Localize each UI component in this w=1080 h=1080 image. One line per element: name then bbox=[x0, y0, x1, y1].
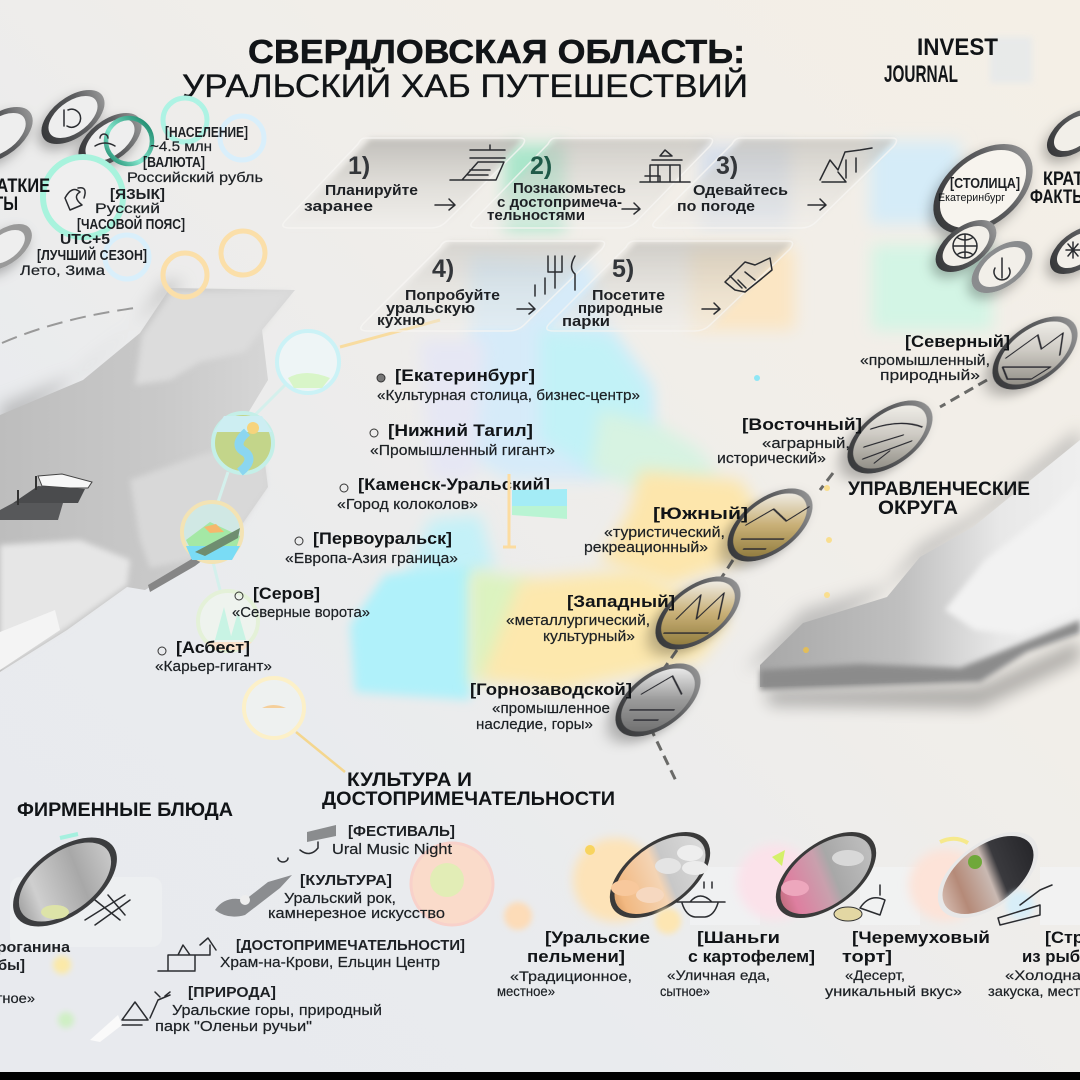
left fact texts bbox=[20, 125, 263, 278]
card 3: по погоде bbox=[677, 199, 755, 215]
city labels: «Культурная столица, бизнес-центр» bbox=[377, 388, 640, 404]
left fact rings bbox=[0, 93, 265, 297]
card 5: Посетите bbox=[592, 288, 665, 304]
right key facts bbox=[921, 112, 1080, 290]
dish 1: stroganina bbox=[0, 834, 162, 1028]
city labels: «Северные ворота» bbox=[232, 605, 370, 621]
dish 3: shangi: [Шаньги bbox=[697, 929, 780, 947]
card 1: 1) bbox=[348, 152, 370, 180]
city labels: [Первоуральск] bbox=[313, 530, 452, 548]
card 4: Попробуйте bbox=[405, 288, 500, 304]
card 5: парки bbox=[562, 314, 610, 330]
soft colour blobs behind cards bbox=[505, 142, 992, 330]
map: grey paper regions top left bbox=[0, 282, 295, 672]
district labels: «туристический, bbox=[604, 525, 725, 541]
heading: districts bbox=[848, 479, 1030, 519]
logo: INVEST bbox=[917, 34, 998, 61]
flag: left dark bbox=[0, 474, 92, 520]
district medallion: north bbox=[981, 319, 1080, 387]
district labels: [Восточный] bbox=[742, 416, 862, 434]
card 5 bbox=[547, 241, 793, 331]
culture list: Уральский рок, bbox=[284, 891, 396, 907]
district labels: «промышленный, bbox=[860, 353, 990, 369]
heading: signature dishes: ФИРМЕННЫЕ БЛЮДА bbox=[17, 800, 233, 821]
district labels: наследие, горы» bbox=[476, 717, 593, 733]
culture list: [КУЛЬТУРА] bbox=[300, 873, 392, 889]
bottom black band bbox=[0, 1072, 1080, 1080]
dish 2: pelmeni: [Уральские bbox=[545, 929, 650, 947]
dish 4: cherry cake bbox=[825, 834, 1080, 999]
culture list: [ФЕСТИВАЛЬ] bbox=[348, 824, 455, 840]
dish 2: pelmeni bbox=[497, 834, 760, 999]
decorative map dots bbox=[754, 375, 832, 653]
district labels: рекреационный» bbox=[584, 540, 708, 556]
city labels: [Нижний Тагил] bbox=[388, 422, 533, 440]
heading: culture: КУЛЬТУРА И bbox=[347, 770, 472, 791]
dish 5 label (clipped at right edge): «Холодная bbox=[1005, 967, 1080, 983]
dish 4: cherry cake: «Десерт, bbox=[845, 967, 905, 983]
card 1: заранее bbox=[304, 199, 373, 215]
title bbox=[182, 33, 748, 104]
district labels: исторический» bbox=[717, 451, 826, 467]
dish 2: pelmeni: местное» bbox=[497, 983, 555, 999]
dish 2: pelmeni: пельмени] bbox=[527, 948, 625, 966]
right key facts: [СТОЛИЦА] bbox=[950, 176, 1020, 192]
district medallion: west bbox=[644, 579, 752, 647]
card 5: природные bbox=[578, 301, 663, 317]
card 2: 2) bbox=[530, 152, 552, 180]
district labels: культурный» bbox=[543, 629, 635, 645]
heading: districts: ОКРУГА bbox=[878, 498, 958, 519]
city labels: [Каменск-Уральский] bbox=[358, 476, 550, 494]
dish 3: shangi: с картофелем] bbox=[688, 948, 815, 966]
city labels: «Город колоколов» bbox=[337, 497, 478, 513]
district labels: «аграрный, bbox=[762, 436, 850, 452]
card 2: Познакомьтесь bbox=[513, 181, 626, 197]
dish 4: cherry cake: [Черемуховый bbox=[852, 929, 990, 947]
card 4: кухню bbox=[377, 313, 425, 329]
dashed migration arc on the left bbox=[2, 308, 135, 343]
card 4 bbox=[361, 241, 605, 331]
left fact texts: [ВАЛЮТА] bbox=[143, 155, 205, 171]
right key facts: Екатеринбург bbox=[938, 192, 1005, 204]
city labels bbox=[155, 367, 640, 675]
culture list: [ДОСТОПРИМЕЧАТЕЛЬНОСТИ] bbox=[236, 938, 465, 954]
left fact texts: Российский рубль bbox=[127, 169, 263, 185]
dish 3: shangi: «Уличная еда, bbox=[667, 967, 770, 983]
pink salad accent bbox=[411, 843, 532, 930]
yellow line behind card 4 bbox=[340, 320, 440, 347]
dish 4: cherry cake: уникальный вкус» bbox=[825, 983, 962, 999]
left heading: key facts bbox=[0, 176, 50, 215]
card 2 bbox=[471, 138, 713, 228]
route to culture section bbox=[296, 732, 345, 772]
culture list bbox=[90, 824, 465, 1042]
card 3 bbox=[653, 138, 897, 228]
district medallion: south bbox=[716, 491, 824, 559]
heading: culture bbox=[322, 770, 615, 810]
card 5: 5) bbox=[612, 255, 634, 283]
logo bbox=[884, 34, 1032, 88]
logo: JOURNAL bbox=[884, 61, 958, 88]
map: coloured Sverdlovsk region bbox=[350, 255, 765, 700]
district labels: [Северный] bbox=[905, 333, 1010, 351]
card 4: уральскую bbox=[386, 301, 475, 317]
city labels: [Серов] bbox=[253, 585, 320, 603]
city labels: «Карьер-гигант» bbox=[155, 659, 272, 675]
card 1: Планируйте bbox=[325, 183, 418, 199]
left fact texts: [НАСЕЛЕНИЕ] bbox=[165, 125, 248, 141]
left fact texts: Русский bbox=[95, 200, 160, 216]
left fact texts: Лето, Зима bbox=[20, 262, 105, 278]
culture list: Ural Music Night bbox=[332, 842, 452, 858]
district medallion: east bbox=[836, 403, 944, 471]
district labels: [Горнозаводской] bbox=[470, 681, 632, 699]
card 1 bbox=[283, 138, 525, 228]
city labels: «Промышленный гигант» bbox=[370, 443, 555, 459]
card 2: тельностями bbox=[487, 208, 585, 224]
district labels: [Южный] bbox=[653, 505, 748, 523]
district labels: природный» bbox=[880, 368, 980, 384]
title: СВЕРДЛОВСКАЯ ОБЛАСТЬ: bbox=[248, 33, 745, 70]
card 3: Одевайтесь bbox=[693, 183, 788, 199]
district medallion: mining bbox=[604, 666, 712, 734]
card 3: 3) bbox=[716, 152, 738, 180]
culture list: Уральские горы, природный bbox=[172, 1003, 382, 1019]
city labels: [Екатеринбург] bbox=[395, 367, 535, 385]
city medallions bbox=[182, 331, 339, 738]
left fact texts: UTC+5 bbox=[60, 232, 110, 248]
heading: districts: УПРАВЛЕНЧЕСКИЕ bbox=[848, 479, 1030, 500]
culture list: Храм-на-Крови, Ельцин Центр bbox=[220, 955, 440, 971]
culture list: [ПРИРОДА] bbox=[188, 985, 276, 1001]
flag: Sverdlovsk bbox=[503, 474, 567, 547]
map: grey paper regions right bbox=[745, 428, 1080, 708]
culture list: камнерезное искусство bbox=[268, 906, 445, 922]
left fact texts: ~4.5 млн bbox=[150, 138, 212, 154]
culture list: парк "Оленьи ручьи" bbox=[155, 1019, 312, 1035]
district labels: «металлургический, bbox=[506, 613, 650, 629]
district labels bbox=[470, 333, 1010, 733]
left fact texts: [ЛУЧШИЙ СЕЗОН] bbox=[37, 246, 147, 264]
left fact texts: [ЯЗЫК] bbox=[110, 187, 165, 203]
card 2: с достопримеча- bbox=[497, 195, 622, 211]
district labels: «промышленное bbox=[492, 701, 610, 717]
dish 4: cherry cake: торт] bbox=[842, 948, 892, 966]
title: УРАЛЬСКИЙ ХАБ ПУТЕШЕСТВИЙ bbox=[182, 68, 748, 104]
dish 2: pelmeni: «Традиционное, bbox=[510, 968, 632, 984]
dish 3: shangi: сытное» bbox=[660, 983, 710, 999]
left fact texts: [ЧАСОВОЙ ПОЯС] bbox=[77, 215, 185, 233]
heading: culture: ДОСТОПРИМЕЧАТЕЛЬНОСТИ bbox=[322, 789, 615, 810]
city labels: [Асбест] bbox=[176, 639, 250, 657]
dish 5 label (clipped at right edge) bbox=[988, 929, 1080, 999]
district labels: [Западный] bbox=[567, 593, 675, 611]
card 4: 4) bbox=[432, 255, 454, 283]
city labels: «Европа-Азия граница» bbox=[285, 551, 458, 567]
dashed line through district medallions bbox=[650, 380, 987, 783]
dish 3: shangi bbox=[660, 834, 920, 999]
